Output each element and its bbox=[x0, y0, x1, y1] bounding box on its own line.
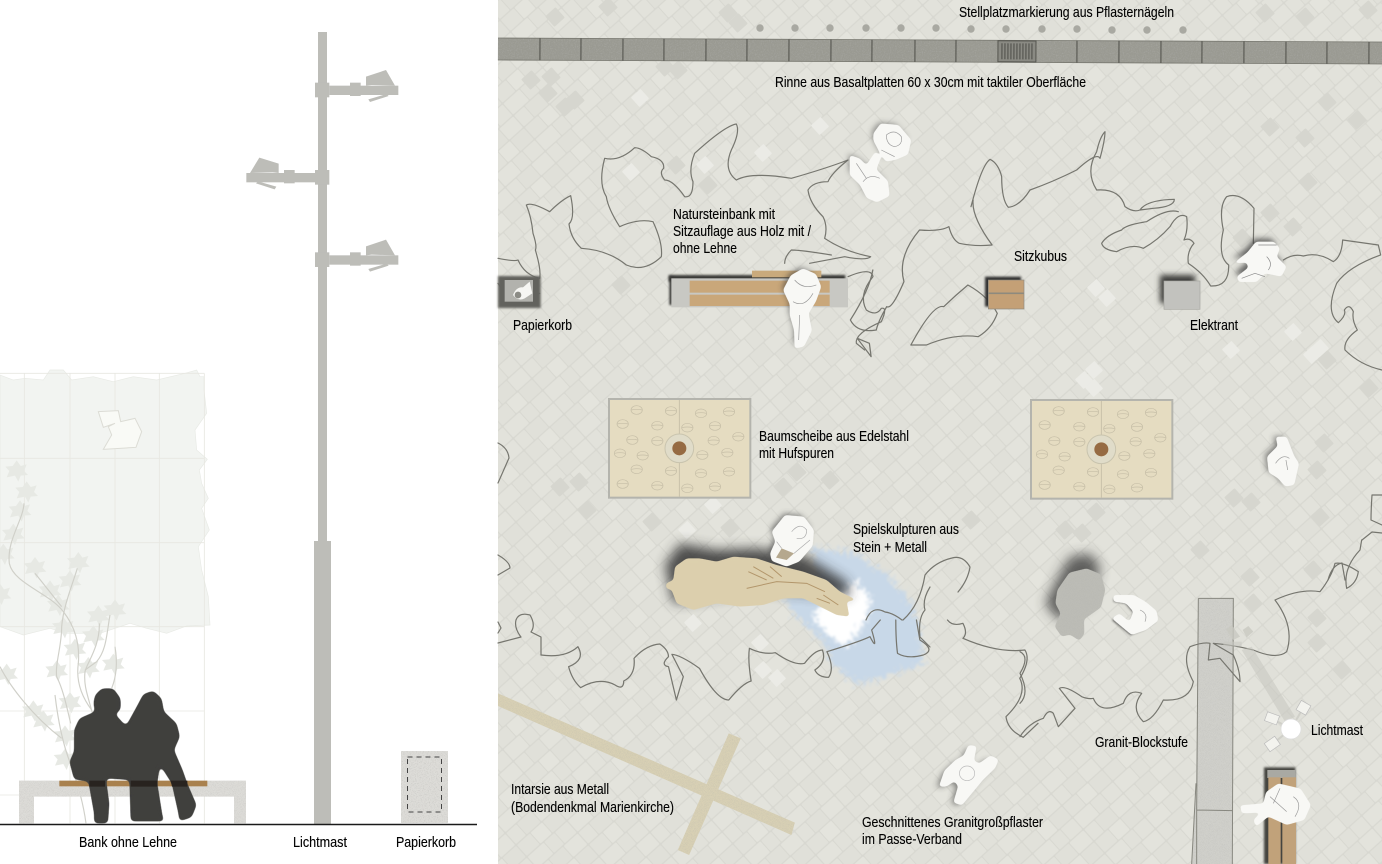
light mast with three arms bbox=[246, 32, 398, 824]
label: Spielskulpturen: Stein + Metall bbox=[853, 540, 927, 556]
label: Papierkorb plan: Papierkorb bbox=[513, 318, 572, 334]
lamp arm: lower right bbox=[315, 240, 398, 272]
label: Granitgroßpflaster bbox=[862, 815, 1043, 848]
label: Intarsie: (Bodendenkmal Marienkirche) bbox=[511, 800, 674, 816]
label: Baumscheibe bbox=[759, 429, 909, 462]
play sculpture: horse bbox=[665, 543, 857, 617]
stone bench with wood seat plan bbox=[669, 271, 848, 307]
person by stone sculpture bbox=[1112, 595, 1158, 635]
panel: elevation view bbox=[0, 0, 498, 864]
stone sculpture bbox=[1045, 553, 1105, 641]
label: Intarsie: Intarsie aus Metall bbox=[511, 782, 609, 798]
label: Natursteinbank bbox=[673, 207, 811, 257]
label: Granit-Blockstufe: Granit-Blockstufe bbox=[1095, 735, 1188, 751]
litter bin elevation bbox=[401, 751, 448, 823]
label: Papierkorb: Papierkorb bbox=[396, 835, 456, 851]
label: Lichtmast: Lichtmast bbox=[293, 835, 347, 851]
electrical outlet bbox=[1160, 275, 1200, 309]
metal inlay cross bbox=[498, 693, 795, 855]
label: Rinne: Rinne aus Basaltplatten 60 x 30cm mit taktiler Oberfläche bbox=[775, 75, 1086, 91]
label: Bank ohne Lehne: Bank ohne Lehne bbox=[79, 835, 177, 851]
label: Intarsie bbox=[511, 782, 674, 816]
lamp arm: middle left bbox=[246, 158, 329, 189]
gutter drain grate bbox=[998, 41, 1036, 62]
paving nail markers bbox=[756, 24, 1187, 34]
meandering outline drawn into paving bbox=[498, 124, 1382, 737]
tree canopy and wall grid bbox=[0, 370, 210, 823]
bench lower right with person bbox=[1240, 767, 1311, 864]
person right middle bbox=[1265, 436, 1299, 487]
label: Elektrant: Elektrant bbox=[1190, 318, 1238, 334]
person at sculpture bbox=[769, 513, 814, 567]
couple silhouette bbox=[69, 688, 197, 823]
label: Baumscheibe: Baumscheibe aus Edelstahl bbox=[759, 429, 909, 445]
granite block step bbox=[1192, 598, 1233, 864]
water spray patch bbox=[783, 547, 923, 685]
label: Granitgroßpflaster: Geschnittenes Granitgroßpflaster bbox=[862, 815, 1043, 831]
label: Baumscheibe: mit Hufspuren bbox=[759, 446, 834, 462]
seating cube bbox=[985, 277, 1024, 309]
label: Natursteinbank: ohne Lehne bbox=[673, 241, 737, 257]
panel: site plan bbox=[498, 0, 1382, 864]
lamp arm: upper right bbox=[315, 70, 398, 102]
tree plate left bbox=[609, 399, 750, 498]
person on bench bbox=[782, 267, 821, 349]
label: Lichtmast plan: Lichtmast bbox=[1311, 723, 1363, 739]
paving bbox=[498, 0, 1382, 864]
litter bin plan bbox=[498, 276, 541, 308]
scattered tonal stones bbox=[521, 0, 1379, 687]
label: Granitgroßpflaster: im Passe-Verband bbox=[862, 832, 962, 848]
person walking bottom bbox=[937, 745, 999, 805]
label: Natursteinbank: Natursteinbank mit bbox=[673, 207, 775, 223]
tree plate right bbox=[1031, 400, 1172, 499]
ground line bbox=[0, 824, 477, 826]
label: Natursteinbank: Sitzauflage aus Holz mit / bbox=[673, 224, 811, 240]
label: Stellplatzmarkierung: Stellplatzmarkierung aus Pflasternägeln bbox=[959, 5, 1174, 21]
basalt gutter bbox=[498, 38, 1382, 64]
label: Spielskulpturen: Spielskulpturen aus bbox=[853, 522, 959, 538]
light mast plan with beam bbox=[1223, 625, 1311, 752]
label: Sitzkubus: Sitzkubus bbox=[1014, 249, 1067, 265]
bench without backrest bbox=[19, 781, 246, 823]
person at top walking bbox=[849, 122, 911, 202]
person near outlet bbox=[1232, 239, 1287, 282]
label: Spielskulpturen bbox=[853, 522, 959, 556]
